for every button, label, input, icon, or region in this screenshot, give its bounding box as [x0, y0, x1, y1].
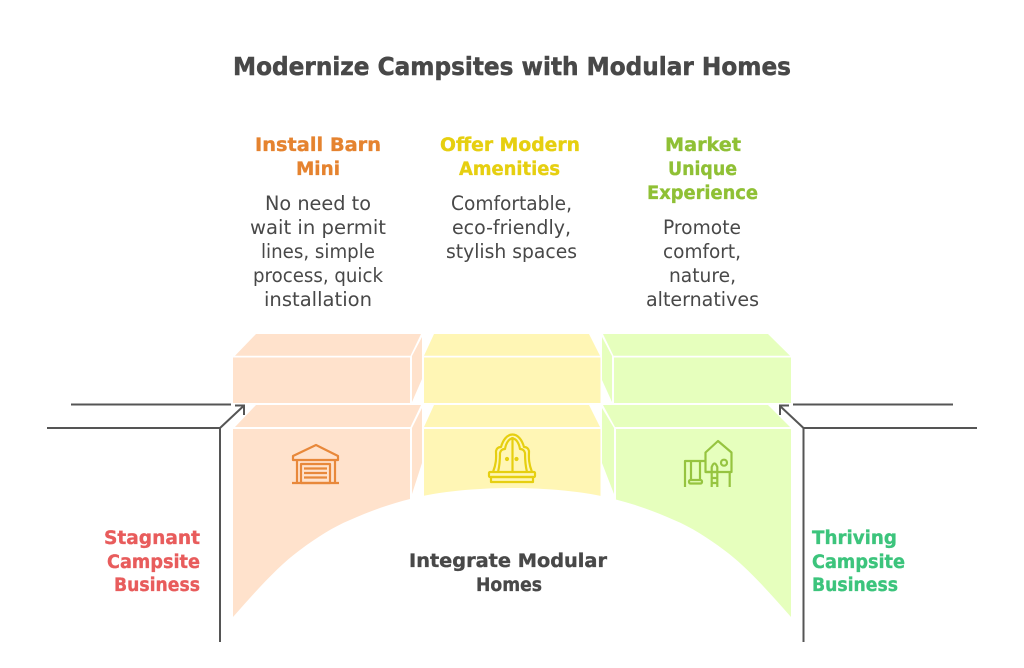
label: thriving campsite business: Thriving [812, 528, 897, 549]
heading: market unique experience: Unique [668, 159, 737, 180]
label: stagnant campsite business: Business [114, 575, 200, 596]
heading: install barn mini: Install Barn [255, 135, 381, 156]
text: offer modern amenities: eco-friendly, [452, 216, 571, 239]
label: integrate modular homes: Homes [476, 575, 542, 596]
thriving side path [780, 404, 977, 642]
label: stagnant campsite business: Stagnant [104, 528, 200, 549]
label: integrate modular homes: Integrate Modular [409, 551, 608, 572]
label: integrate modular homes [409, 551, 608, 596]
text: install barn mini: No need to [265, 192, 371, 215]
text: offer modern amenities: stylish spaces [446, 240, 577, 263]
text: market unique experience: comfort, [663, 240, 741, 263]
stagnant side path [47, 404, 244, 642]
label: thriving campsite business: Campsite [812, 552, 905, 573]
label: thriving campsite business [812, 528, 905, 596]
text: offer modern amenities [446, 192, 577, 263]
icon: arched window [489, 434, 535, 482]
icon: playground treehouse [685, 441, 732, 487]
panel: install barn mini [233, 334, 422, 625]
label: stagnant campsite business: Campsite [107, 552, 200, 573]
label: thriving campsite business: Business [812, 575, 898, 596]
heading: install barn mini [255, 135, 381, 180]
heading: offer modern amenities: Amenities [459, 159, 560, 180]
text: offer modern amenities: Comfortable, [451, 192, 572, 215]
text: install barn mini: process, quick [253, 264, 384, 287]
text: install barn mini [250, 192, 386, 311]
heading: offer modern amenities [440, 135, 580, 180]
title: Modernize Campsites with Modular Homes [233, 52, 791, 81]
text: install barn mini: wait in permit [250, 216, 386, 239]
text: market unique experience [646, 216, 759, 311]
icon: garage [292, 445, 339, 483]
text: market unique experience: nature, [669, 264, 736, 287]
text: install barn mini: lines, simple [261, 240, 375, 263]
text: install barn mini: installation [264, 288, 372, 311]
central arch [233, 488, 791, 668]
panel: market unique experience [602, 334, 791, 625]
heading: install barn mini: Mini [296, 159, 340, 180]
text: market unique experience: Promote [663, 216, 741, 239]
heading: market unique experience [647, 135, 758, 204]
label: stagnant campsite business [104, 528, 200, 596]
panel: offer modern amenities [424, 334, 600, 509]
heading: offer modern amenities: Offer Modern [440, 135, 580, 156]
heading: market unique experience: Experience [647, 183, 758, 204]
heading: market unique experience: Market [665, 135, 741, 156]
text: market unique experience: alternatives [646, 288, 759, 311]
